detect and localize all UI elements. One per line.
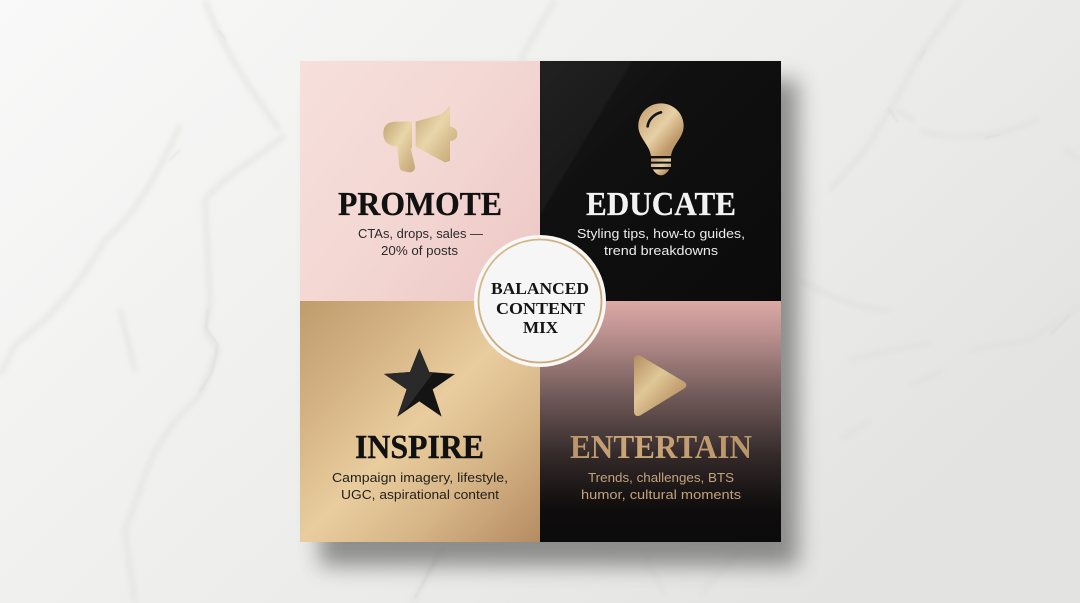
icon: megaphone [383,106,457,172]
panel: inspire [300,301,540,542]
text: promote description [358,226,484,258]
badge label: BALANCED [491,279,589,298]
heading: promote: PROMOTE [338,186,502,223]
badge label [491,279,589,337]
text: entertain description [581,470,741,502]
panel: promote [300,61,540,301]
icon: star [384,348,455,417]
center badge [474,235,606,367]
text: promote description: 20% of posts [381,243,458,258]
text: inspire description: UGC, aspirational content [341,487,499,502]
panel: entertain [540,301,781,542]
badge label: CONTENT [496,299,586,318]
text: educate description: Styling tips, how-to guides, [577,226,745,241]
icon: play triangle [634,355,686,416]
text: promote description: CTAs, drops, sales — [358,226,484,241]
text: educate description [577,226,745,258]
text: entertain description: humor, cultural moments [581,487,741,502]
badge label: MIX [523,318,559,337]
text: entertain description: Trends, challenges, BTS [588,470,734,485]
text: inspire description [332,470,508,502]
heading: inspire: INSPIRE [355,429,484,466]
text: inspire description: Campaign imagery, lifestyle, [332,470,508,485]
panel: educate [540,61,781,301]
text: educate description: trend breakdowns [604,243,718,258]
card shadow [320,80,798,566]
icon: light bulb [638,103,684,175]
heading: entertain: ENTERTAIN [570,429,752,466]
heading: educate: EDUCATE [586,186,736,223]
